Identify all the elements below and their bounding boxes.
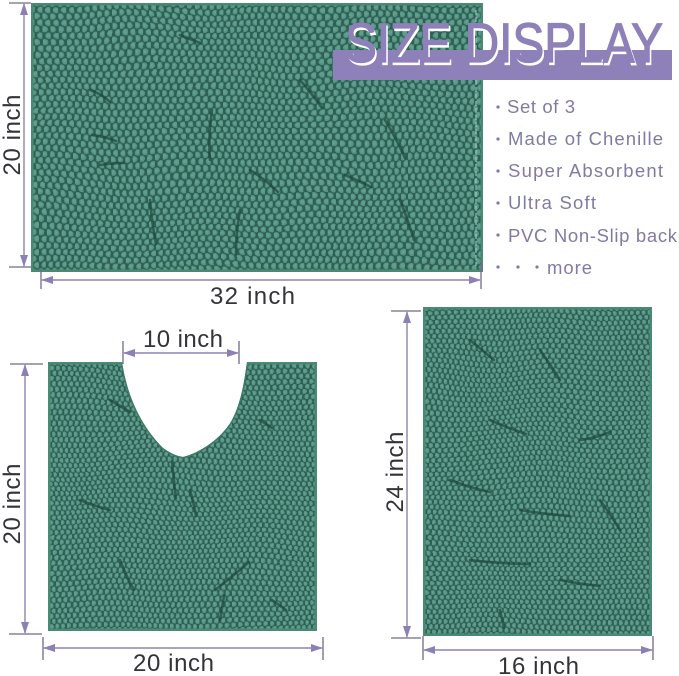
- dimension: large mat width: 32 inch: [210, 283, 295, 310]
- feature list: PVC Non-Slip back: [508, 225, 678, 246]
- rug: large rectangular mat: [26, 0, 488, 277]
- dimension: cutout width: [123, 326, 239, 364]
- feature list: Set of 3: [507, 96, 575, 117]
- dimension: tall mat height: [382, 311, 421, 638]
- dimension: contour mat width: [43, 637, 323, 676]
- dimension: large mat height: [0, 3, 31, 267]
- feature list: Made of Chenille: [508, 128, 663, 149]
- feature list: [496, 96, 678, 278]
- dimension: contour mat height: [0, 364, 43, 634]
- feature list: Ultra Soft: [508, 192, 596, 213]
- rug: contour mat with U cutout: [43, 357, 322, 636]
- dimension: tall mat height: 24 inch: [382, 432, 409, 512]
- dimension: large mat width: [41, 262, 481, 310]
- feature list: Super Absorbent: [508, 160, 663, 181]
- dimension: tall mat width: [423, 636, 653, 676]
- feature list: more: [547, 257, 592, 278]
- title band: [333, 50, 672, 80]
- rug: tall rectangular mat: [418, 302, 657, 641]
- dimension: cutout width: 10 inch: [143, 326, 223, 353]
